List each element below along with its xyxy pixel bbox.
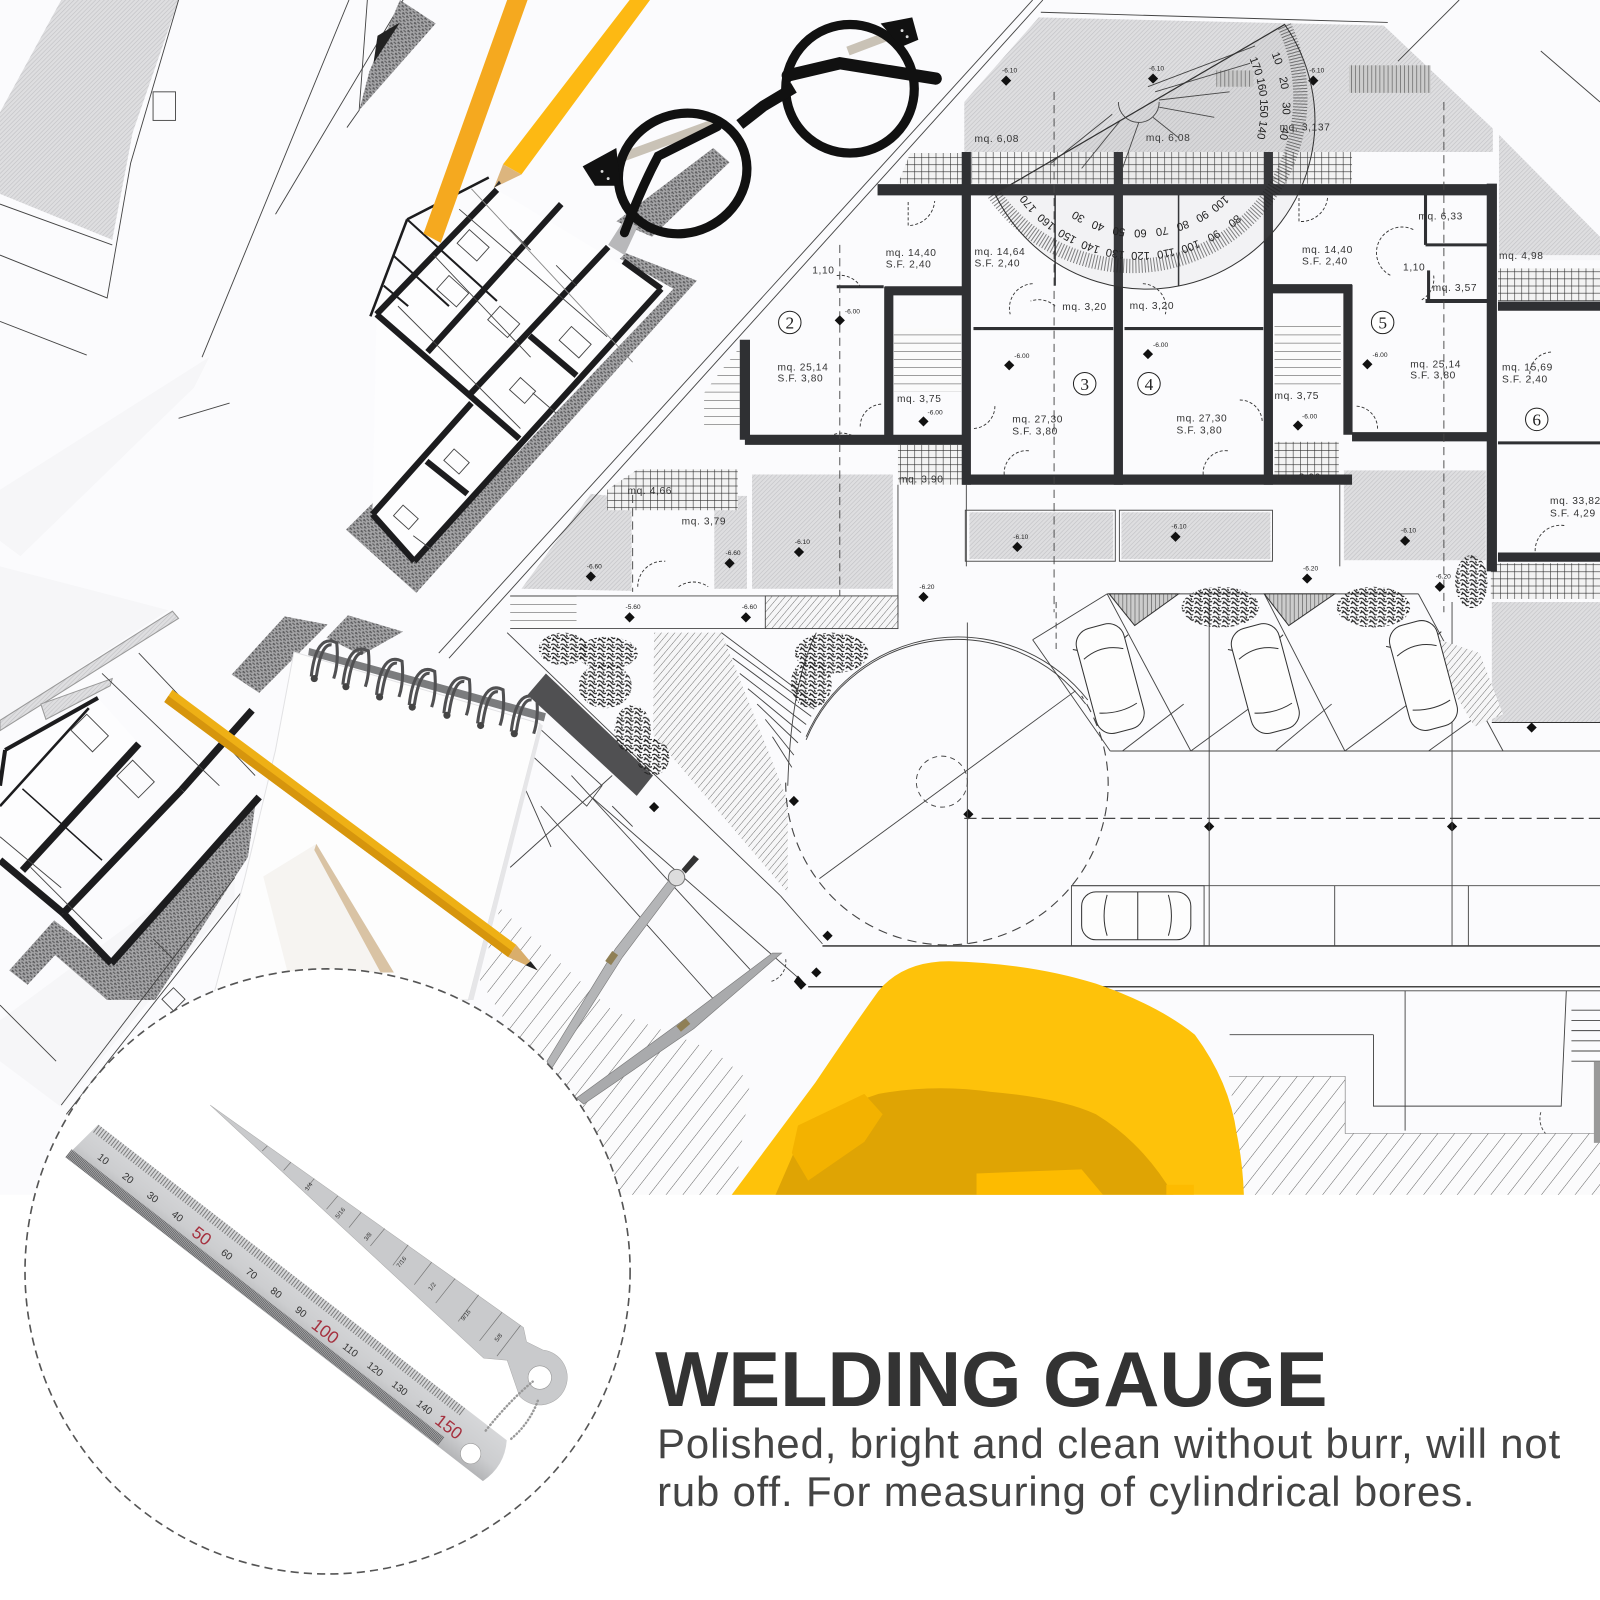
room area labels: S.F. 3,80 <box>1012 427 1058 438</box>
unit number circles <box>779 311 1548 431</box>
protractor: 60 <box>1134 227 1147 239</box>
level markers: -6.00 <box>1372 352 1388 359</box>
level markers: -6.10 <box>1149 65 1164 72</box>
unit number circles: 6 <box>1532 411 1541 430</box>
ruler numbers: 40 <box>169 1209 185 1225</box>
ruler numbers: 70 <box>243 1266 259 1282</box>
level markers: -6.20 <box>1303 565 1318 572</box>
protractor: 30 <box>1070 208 1087 225</box>
drawing compass <box>547 855 782 1104</box>
lower-left hatched site areas <box>480 730 1600 1195</box>
room area labels: 1,10 <box>1403 262 1425 273</box>
ruler numbers <box>92 1148 466 1443</box>
gauge labels: 9/16 <box>460 1308 473 1322</box>
level markers: -6.20 <box>1436 574 1451 581</box>
protractor: 150 <box>1257 99 1269 118</box>
yellow hard hat <box>732 961 1244 1195</box>
room area labels: S.F. 2,40 <box>886 259 931 270</box>
room area labels: mq. 25,14 <box>1410 359 1461 370</box>
level markers: -6.60 <box>742 604 757 611</box>
protractor: 30 <box>1280 102 1292 115</box>
room area labels: mq. 27,30 <box>1012 414 1063 425</box>
protractor: 140 <box>1254 120 1269 140</box>
title: WELDING GAUGE <box>655 1335 1328 1423</box>
level markers: -6.10 <box>1013 534 1029 541</box>
product circle <box>25 969 630 1574</box>
room area labels: S.F. 4,29 <box>1550 508 1596 519</box>
room area labels: mq. 3,79 <box>682 516 726 527</box>
parking and driveway site plan <box>507 594 1600 1141</box>
ruler numbers: 30 <box>144 1190 160 1206</box>
notepad <box>212 641 546 1000</box>
unit number circles: 4 <box>1145 375 1154 394</box>
ruler numbers: 140 <box>414 1398 434 1418</box>
unit number circles: 5 <box>1378 314 1387 333</box>
room area labels: S.F. 2,40 <box>1302 256 1348 267</box>
floor plan: hatched outdoor areas <box>521 17 1600 722</box>
room area labels: mq. 27,30 <box>1177 413 1227 424</box>
unit number circles: 2 <box>785 314 794 333</box>
top-left rolled plan sheet <box>0 0 436 418</box>
room area labels: mq. 6,08 <box>974 134 1019 145</box>
ruler numbers: 20 <box>120 1171 136 1187</box>
steel ruler <box>65 1121 514 1483</box>
protractor: 120 <box>1131 249 1150 261</box>
gauge labels <box>304 1181 505 1343</box>
room area labels: mq. 14,40 <box>886 248 937 259</box>
protractor: 10 <box>1269 51 1284 67</box>
protractor: 160 <box>1254 77 1269 97</box>
floor plan: boundary and thin linework <box>439 0 1600 658</box>
room area labels: mq. 15,69 <box>1502 362 1553 373</box>
level markers: -6.20 <box>919 584 935 591</box>
ruler numbers: 90 <box>293 1305 309 1321</box>
protractor: 20 <box>1276 76 1290 90</box>
gauge labels: 1/2 <box>427 1281 438 1292</box>
protractor: 160 <box>1036 211 1058 232</box>
room area labels: mq. 3,137 <box>1280 123 1330 134</box>
protractor: 80 <box>1225 212 1243 229</box>
level markers <box>586 65 1537 978</box>
taper gauge <box>210 1105 567 1439</box>
ruler numbers: 50 <box>188 1222 216 1250</box>
gauge labels: 5/8 <box>493 1332 505 1343</box>
room area labels: S.F. 3,80 <box>1177 426 1222 437</box>
room area labels: mq. 6,33 <box>1418 211 1463 222</box>
unit number circles: 3 <box>1080 375 1089 394</box>
room area labels: mq. 4,66 <box>628 486 672 497</box>
protractor: 140 <box>1080 238 1101 255</box>
parked cars <box>1069 616 1465 940</box>
ruler top ticks <box>93 1125 466 1416</box>
yellow pencil on notepad <box>164 690 538 970</box>
room area labels: mq. 14,64 <box>974 247 1025 258</box>
protractor <box>994 24 1315 289</box>
level markers: -6.60 <box>726 550 741 557</box>
protractor: 90 <box>1194 207 1210 224</box>
ruler numbers: 130 <box>389 1379 410 1399</box>
left sheet: section drawing <box>0 611 403 1114</box>
description: Polished, bright and clean without burr, will not <box>657 1420 1561 1467</box>
room area labels: S.F. 2,40 <box>1502 375 1548 386</box>
level markers: -6.00 <box>1153 342 1168 349</box>
room area labels: mq. 4,98 <box>1499 251 1544 262</box>
description: rub off. For measuring of cylindrical bores. <box>657 1468 1474 1515</box>
protractor: 40 <box>1277 127 1291 141</box>
section drawing: interior thin lines <box>394 189 633 551</box>
gauge labels: 1/4 <box>304 1181 315 1192</box>
ruler numbers: 110 <box>340 1341 360 1360</box>
room area labels: mq. 3,20 <box>1062 302 1107 313</box>
floor plan: door swings <box>638 198 1564 587</box>
room area labels: mq. 33,82 <box>1550 496 1600 507</box>
room area labels: S.F. 3,80 <box>778 374 823 385</box>
room area labels: mq. 3,57 <box>1433 283 1477 294</box>
protractor: 130 <box>1105 245 1125 260</box>
room area labels: mq. 3,75 <box>1274 391 1319 402</box>
planting clusters <box>539 555 1488 776</box>
level markers: -6.00 <box>1014 353 1030 360</box>
ruler numbers: 80 <box>268 1286 284 1301</box>
protractor: 70 <box>1155 224 1169 238</box>
level markers: -6.10 <box>795 539 810 546</box>
room area labels: mq. 14,40 <box>1302 245 1353 256</box>
gauge labels: 7/16 <box>395 1255 409 1269</box>
ruler numbers: 100 <box>308 1314 343 1348</box>
level markers: -6.10 <box>1309 67 1325 74</box>
level markers: -6.10 <box>1002 67 1017 74</box>
white lower band <box>0 1195 1600 1600</box>
protractor: 150 <box>1056 226 1079 246</box>
floor plan: tile grids <box>607 152 1600 599</box>
yellow pencils <box>423 0 650 243</box>
level markers: -6.60 <box>587 563 602 570</box>
protractor: 110 <box>1156 245 1176 260</box>
room area labels: 1,10 <box>812 265 835 276</box>
level markers: -6.00 <box>1302 413 1317 420</box>
section drawing: walls and roof <box>370 178 673 561</box>
room area labels: mq. 6,08 <box>1146 133 1190 144</box>
ruler numbers: 150 <box>431 1410 466 1443</box>
protractor: 80 <box>1175 217 1191 233</box>
level markers: -6.00 <box>845 308 860 315</box>
ruler numbers: 10 <box>95 1152 111 1168</box>
ball chain <box>486 1382 539 1439</box>
level markers: -6.00 <box>928 409 943 416</box>
protractor: 50 <box>1112 224 1126 238</box>
room area labels: S.F. 2,40 <box>974 258 1020 269</box>
ruler bottom ticks <box>65 1149 445 1445</box>
paper sheet shading <box>0 135 1600 1107</box>
section drawing: hatched ground <box>346 148 730 593</box>
gauge labels: 3/8 <box>363 1231 374 1242</box>
room area labels: mq. 3,20 <box>1130 301 1174 312</box>
spiral stairs <box>1051 46 1255 168</box>
room area labels: mq. 3,90 <box>899 475 944 486</box>
gauge graduation lines <box>262 1146 520 1356</box>
room area labels <box>628 123 1600 527</box>
protractor: 100 <box>1180 237 1201 255</box>
room area labels: mq. 3,90 <box>1277 473 1321 484</box>
floor plan: walls <box>745 152 1600 571</box>
eraser <box>263 844 394 1005</box>
ruler numbers: 60 <box>218 1247 234 1263</box>
black round glasses <box>583 17 936 255</box>
protractor: 170 <box>1247 56 1264 77</box>
floor plan: stair flights <box>510 65 1431 629</box>
room area labels: mq. 25,14 <box>778 362 828 373</box>
level markers: -6.10 <box>1171 524 1187 531</box>
ruler numbers: 120 <box>364 1360 385 1380</box>
room area labels: S.F. 3,80 <box>1410 371 1456 382</box>
level markers: -5.60 <box>626 604 641 611</box>
ruler hole <box>456 1439 485 1468</box>
protractor: 40 <box>1090 218 1106 233</box>
level markers: -6.10 <box>1401 528 1416 535</box>
gauge labels: 5/16 <box>334 1206 347 1220</box>
gauge hole <box>528 1366 552 1389</box>
protractor: 100 <box>1209 193 1231 214</box>
room area labels: mq. 3,75 <box>897 394 941 405</box>
protractor: 170 <box>1018 193 1039 215</box>
protractor: 90 <box>1205 227 1222 243</box>
